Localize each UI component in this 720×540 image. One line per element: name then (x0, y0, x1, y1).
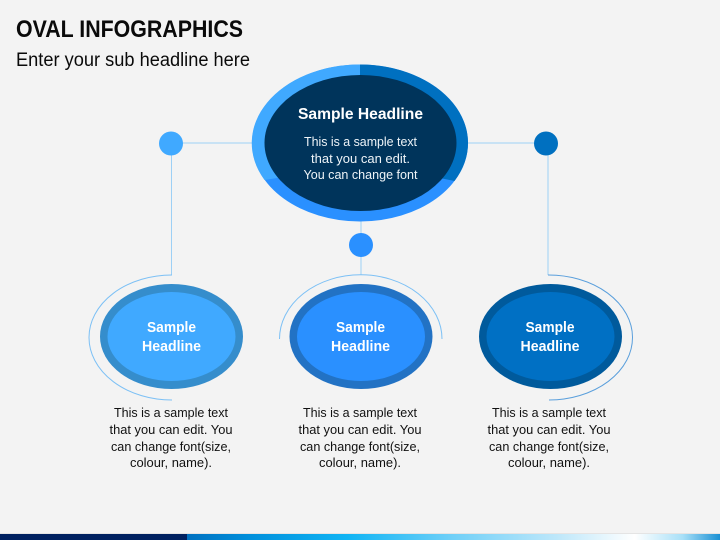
arc: centre (280, 275, 442, 339)
text block: right: can change font(size, (489, 439, 609, 454)
text block: left: that you can edit. You (110, 422, 232, 437)
text block: left: colour, name). (130, 455, 212, 470)
oval: left: Sample (147, 320, 196, 336)
text block: right (488, 405, 610, 470)
footer bar (0, 533, 720, 540)
main oval headline: Sample Headline (298, 106, 423, 123)
oval: right: Sample (526, 320, 574, 336)
oval: centre: Headline (331, 339, 390, 355)
text block: left: can change font(size, (111, 439, 231, 454)
oval: right: Headline (520, 339, 580, 355)
main oval text: You can change font (304, 167, 418, 182)
connector: right (467, 143, 548, 275)
oval: left: Headline (142, 339, 201, 355)
text block: right: colour, name). (508, 455, 590, 470)
text block: left: This is a sample text (114, 405, 228, 420)
subtitle: Enter your sub headline here (16, 50, 250, 71)
text block: centre (298, 405, 422, 470)
text block: centre: can change font(size, (300, 439, 420, 454)
main oval text: This is a sample text (304, 134, 417, 149)
text block: left (110, 405, 232, 470)
icon: left node dot (159, 132, 183, 156)
text block: centre: This is a sample text (303, 405, 417, 420)
text block: right: This is a sample text (492, 405, 606, 420)
connector: left (172, 143, 252, 275)
oval: left (100, 284, 243, 389)
main oval text (304, 134, 418, 182)
oval: right (479, 284, 622, 389)
text block: centre: that you can edit. You (298, 422, 422, 437)
text block: centre: colour, name). (319, 455, 401, 470)
arc: right (548, 275, 633, 400)
text block: right: that you can edit. You (488, 422, 610, 437)
icon: right node dot (534, 132, 558, 156)
icon: centre node dot (349, 233, 373, 257)
arc: left (89, 275, 172, 400)
oval: centre: Sample (336, 320, 385, 336)
title: OVAL INFOGRAPHICS (16, 16, 243, 43)
main oval (252, 64, 468, 222)
oval: centre (290, 284, 432, 389)
main oval text: that you can edit. (311, 151, 410, 166)
connector: centre (360, 221, 362, 275)
